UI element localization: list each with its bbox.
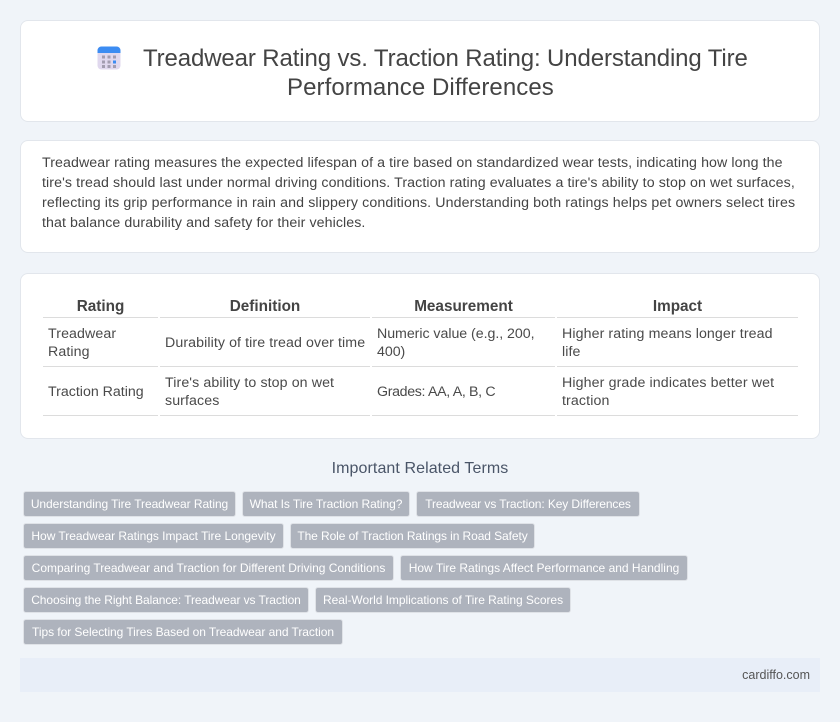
heading: related terms: Important Related Terms (332, 460, 508, 477)
related term tags: Comparing Treadwear and Traction for Different Driving Conditions (32, 561, 385, 575)
table: traction (562, 393, 610, 409)
footer source: cardiffo.com (742, 668, 810, 682)
table: Rating (48, 344, 90, 360)
summary text: that balance durability and safety for their vehicles. (42, 215, 365, 231)
panel: comparison table (20, 273, 820, 439)
related term tags: Real-World Implications of Tire Rating Scores (323, 593, 563, 607)
table (43, 298, 798, 416)
table: Traction Rating (48, 384, 144, 400)
table: Measurement (414, 298, 513, 315)
table: surfaces (165, 393, 219, 409)
table: Definition (230, 298, 300, 315)
table: Tire's ability to stop on wet (165, 375, 334, 391)
summary text: reflecting its grip performance in rain and slippery conditions. Understanding both ratings helps pet owners select tires (42, 195, 795, 211)
related term tags: Treadwear vs Traction: Key Differences (425, 497, 631, 511)
table: Higher rating means longer tread (562, 326, 773, 342)
footer bar (20, 658, 820, 692)
related term tags: How Tire Ratings Affect Performance and Handling (409, 561, 679, 575)
panel: summary (20, 140, 820, 253)
header panel (20, 20, 820, 122)
related term tags: How Treadwear Ratings Impact Tire Longevity (31, 529, 276, 543)
title: Performance Differences (287, 74, 554, 101)
table: Rating (77, 298, 124, 315)
related term tags: What Is Tire Traction Rating? (250, 497, 402, 511)
summary text: tire's tread should last under normal driving conditions. Traction rating evaluates a tire's ability to stop on wet surfaces, (42, 175, 795, 191)
icon: calendar (98, 46, 120, 70)
table: Impact (653, 298, 702, 315)
table: Grades: AA, A, B, C (377, 384, 495, 400)
table: Higher grade indicates better wet (562, 375, 774, 391)
table: Durability of tire tread over time (165, 335, 365, 351)
summary text: Treadwear rating measures the expected lifespan of a tire based on standardized wear tests, indicating how long the (42, 155, 783, 171)
related term tags: Choosing the Right Balance: Treadwear vs Traction (31, 593, 301, 607)
summary text (42, 155, 795, 231)
table: Treadwear (48, 326, 116, 342)
related term tags: The Role of Traction Ratings in Road Safety (297, 529, 528, 543)
table: 400) (377, 344, 405, 360)
title: Treadwear Rating vs. Traction Rating: Understanding Tire (143, 45, 748, 72)
related term tags: Understanding Tire Treadwear Rating (31, 497, 228, 511)
table: Numeric value (e.g., 200, (377, 326, 535, 342)
table: life (562, 344, 581, 360)
title (143, 45, 748, 101)
related term tags (23, 491, 688, 645)
related term tags: Tips for Selecting Tires Based on Treadwear and Traction (32, 625, 334, 639)
